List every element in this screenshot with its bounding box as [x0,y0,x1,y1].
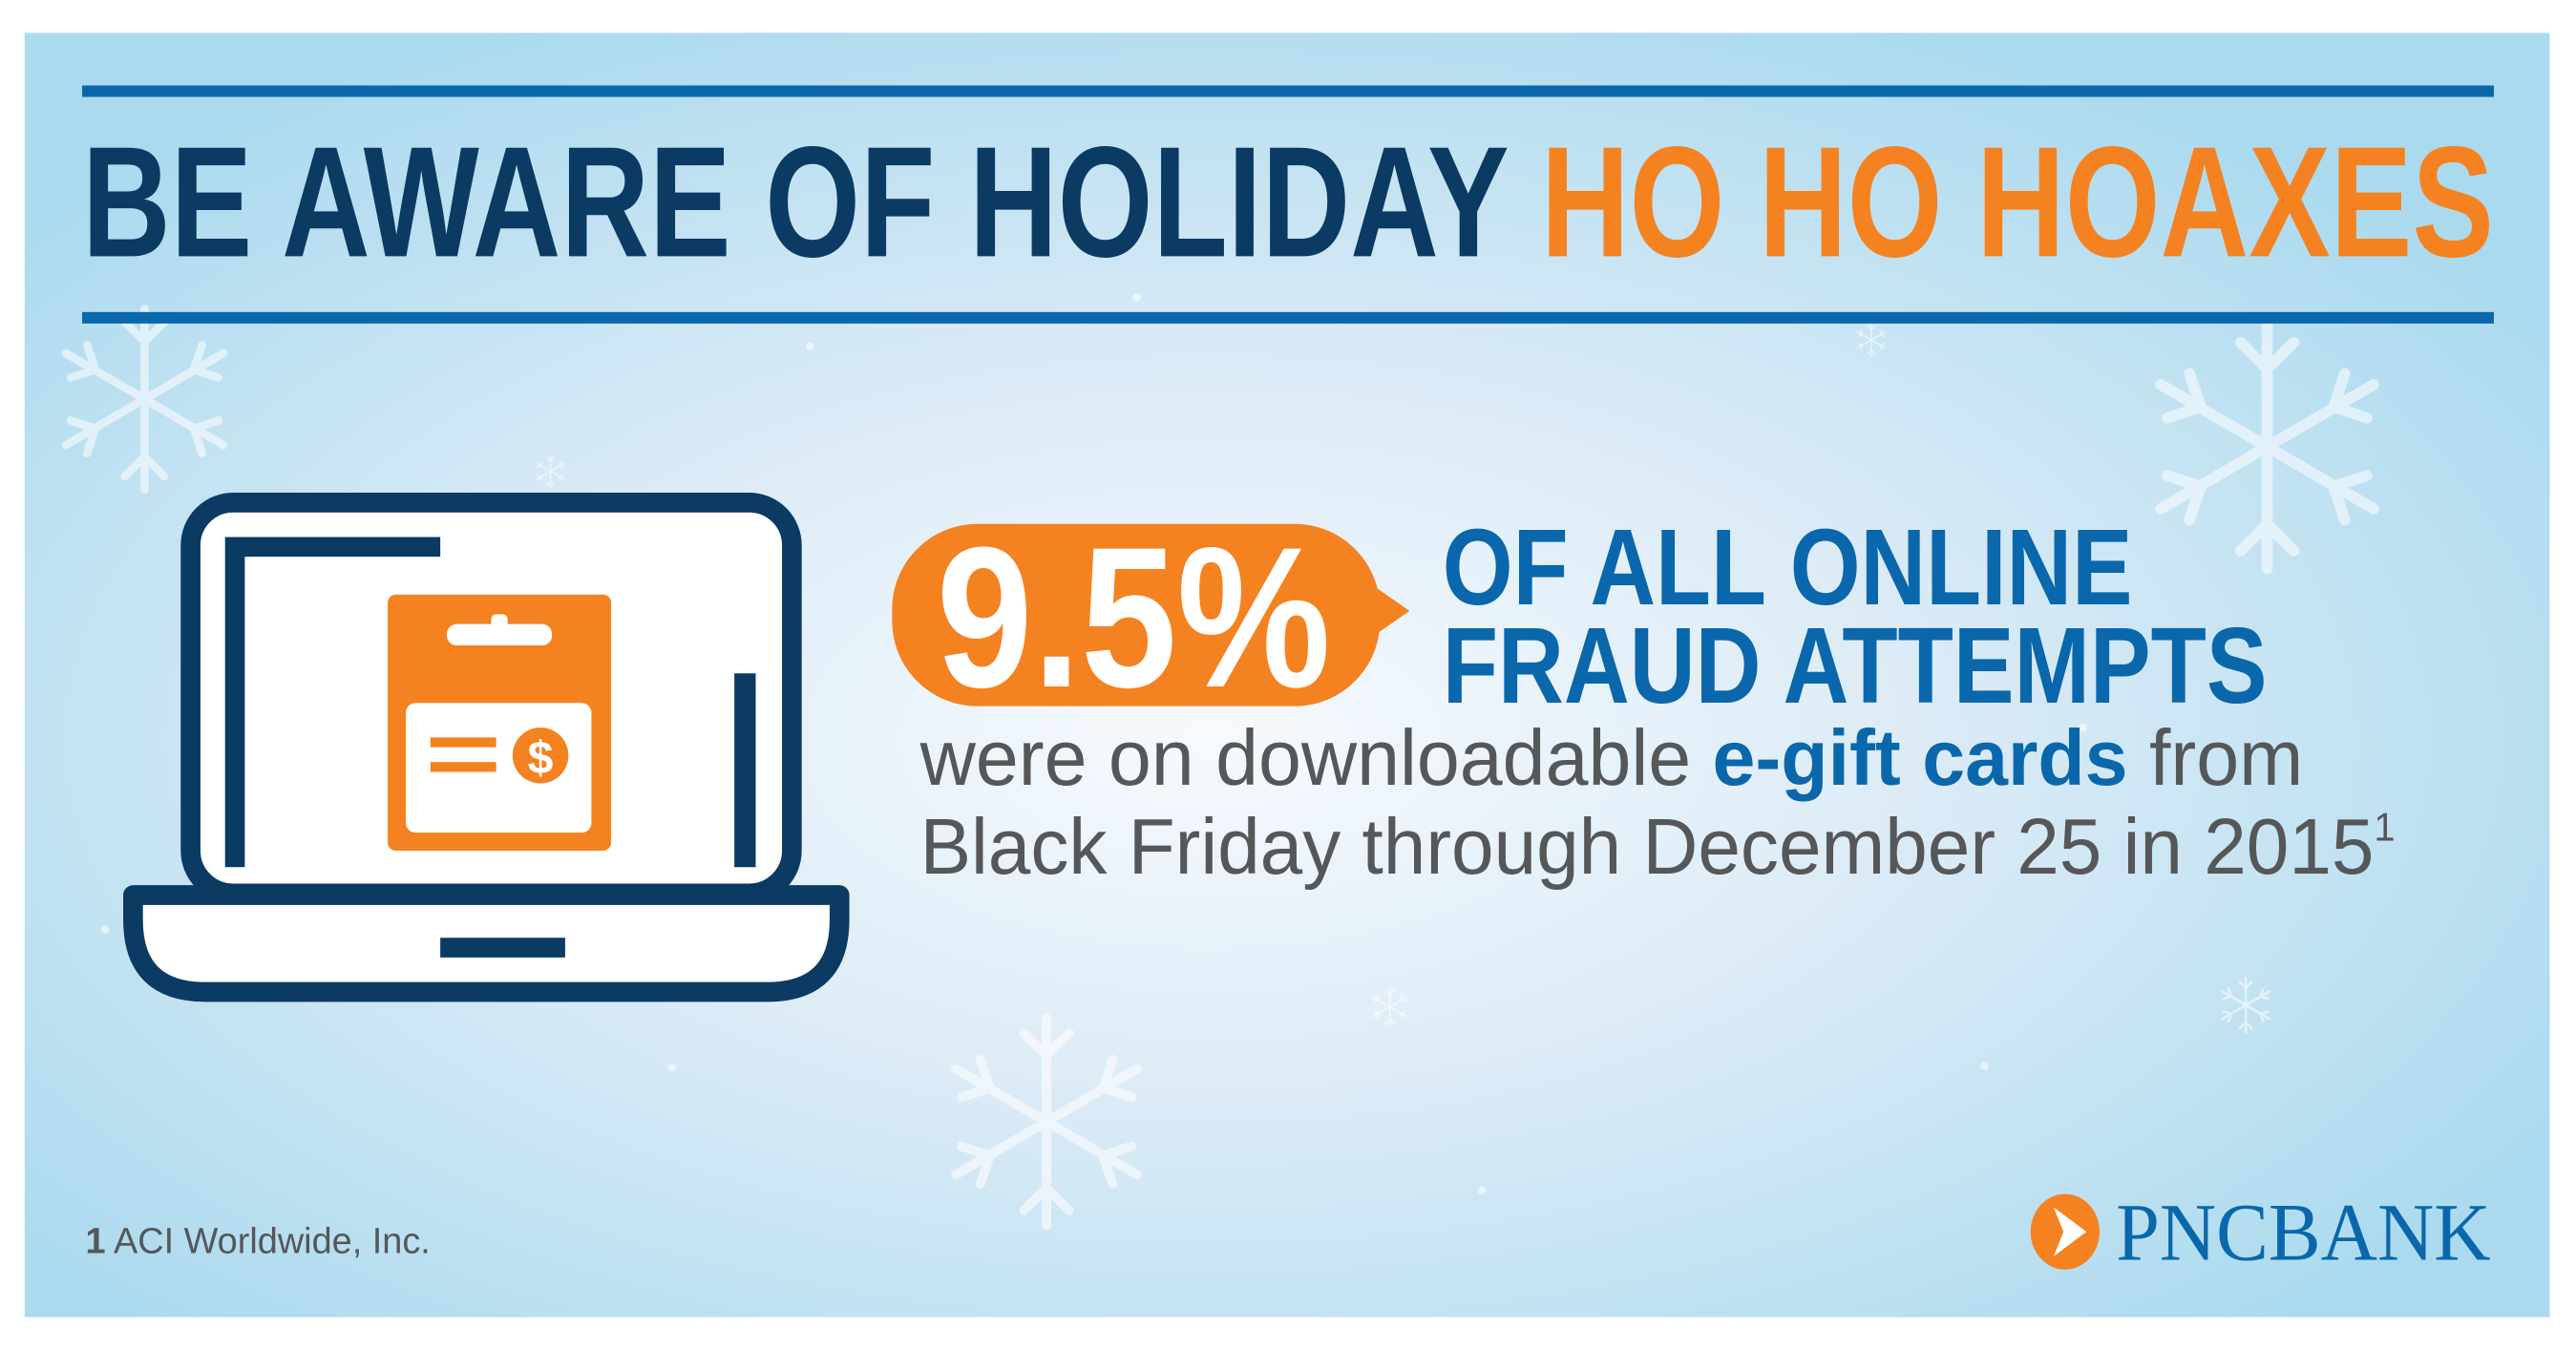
heading: fraud attempts: FRAUD ATTEMPTS [1443,605,2268,727]
text block: description [919,714,2396,891]
decorative snowflakes [66,293,2374,1226]
icon: gift card: $ [528,732,554,784]
icon: laptop with gift card [133,502,839,992]
text block: description: were on downloadable e-gift cards from [919,714,2303,802]
logo: PNC Bank: PNCBANK [2116,1186,2491,1277]
icon: gift card [388,595,611,851]
heading: fraud attempts [1443,507,2268,727]
callout: 9.5% bubble: 9.5% [937,506,1331,729]
footnote: 1 ACI Worldwide, Inc. [85,1222,431,1262]
text block: description: Black Friday through December 25 in 2015 [920,803,2419,891]
text block: description: 1 [2374,806,2396,850]
heading: fraud attempts: OF ALL ONLINE [1443,507,2132,628]
